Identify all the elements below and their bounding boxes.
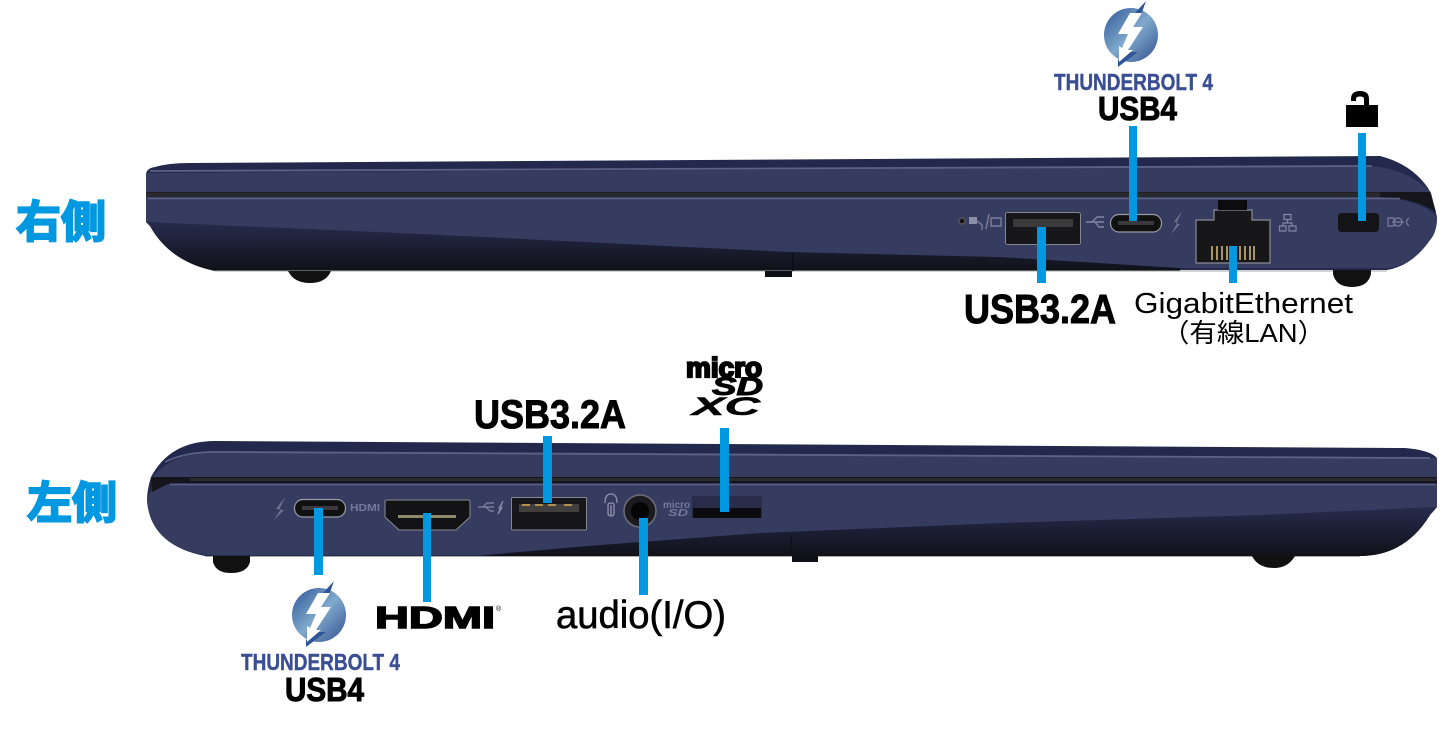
laptop: right side view — [146, 156, 1437, 287]
icon: open padlock — [1346, 91, 1378, 127]
logo: Thunderbolt 4 bottom — [241, 581, 400, 675]
label: HDMI small: HDMI — [350, 503, 380, 514]
logo: microSD XC: micro — [686, 352, 762, 383]
hinge tab — [765, 252, 794, 277]
logo: Thunderbolt 4 top — [1054, 1, 1213, 95]
lid band — [146, 166, 1431, 193]
base band — [146, 197, 1437, 268]
heading: left side: 左側 — [27, 479, 117, 528]
icon: USB symbol — [1086, 217, 1104, 227]
label: microSD small: micro — [663, 500, 690, 511]
hinge tab — [790, 537, 818, 562]
port: USB-C left — [294, 500, 346, 517]
port: audio jack — [624, 495, 656, 527]
heading: right side: 右側 — [16, 198, 106, 247]
port: Ethernet — [1196, 200, 1270, 263]
lower wedge — [146, 222, 1180, 271]
base band — [147, 484, 1437, 555]
label: audio I/O: audio(I/O) — [556, 594, 726, 637]
laptop: left side view — [147, 441, 1437, 573]
rubber foot right — [1252, 556, 1295, 568]
label: microSD small — [663, 500, 690, 519]
icon: thunderbolt circle — [1104, 1, 1158, 67]
label: THUNDERBOLT 4: THUNDERBOLT 4 — [241, 649, 400, 675]
label: USB3.2A left: USB3.2A — [474, 393, 626, 437]
rubber foot left — [288, 271, 331, 283]
port: USB-A right — [1006, 212, 1080, 244]
icon: headset — [605, 494, 617, 516]
connector lines: left side — [314, 428, 729, 602]
lower wedge — [480, 507, 1437, 556]
logo: HDMI: ® — [496, 605, 502, 613]
laptop body silhouette — [147, 441, 1437, 556]
label: USB4 top: USB4 — [1098, 90, 1178, 127]
label: Gigabit Ethernet: （有線LAN） — [1162, 318, 1325, 348]
icon: lock symbol small — [1388, 218, 1409, 226]
icon: thunderbolt symbol left — [274, 497, 285, 520]
icon: network — [1280, 214, 1296, 231]
logo: microSD XC — [686, 352, 763, 421]
port: microSD slot — [692, 496, 762, 518]
label: USB4 bottom: USB4 — [285, 671, 365, 708]
label: THUNDERBOLT 4: THUNDERBOLT 4 — [1054, 69, 1213, 95]
logo: HDMI — [375, 600, 502, 635]
label: microSD small: SD — [668, 508, 688, 519]
port: security lock slot — [1338, 213, 1379, 232]
port: USB-C right — [1110, 214, 1162, 232]
lid band — [151, 453, 1437, 479]
port: USB-A left — [512, 498, 586, 530]
laptop body silhouette — [146, 156, 1437, 270]
label: Gigabit Ethernet — [1134, 288, 1353, 348]
logo: microSD XC: SD — [712, 373, 763, 401]
icon: thunderbolt circle — [292, 581, 346, 647]
port icons: power and battery — [959, 214, 1001, 230]
rubber foot left — [213, 556, 250, 573]
hinge seam — [146, 192, 1436, 212]
icon: thunderbolt symbol right — [1171, 211, 1182, 234]
label: USB3.2A right: USB3.2A — [964, 286, 1116, 332]
connector lines: right side — [1037, 126, 1366, 283]
label: Gigabit Ethernet: GigabitEthernet — [1134, 288, 1353, 320]
port: HDMI — [385, 500, 470, 530]
logo: microSD XC: XC — [688, 393, 762, 421]
icon: USB and charge symbol — [478, 501, 503, 514]
rubber foot right — [1333, 270, 1371, 287]
logo: HDMI: HDMI — [375, 600, 495, 635]
hinge seam — [151, 477, 1437, 492]
